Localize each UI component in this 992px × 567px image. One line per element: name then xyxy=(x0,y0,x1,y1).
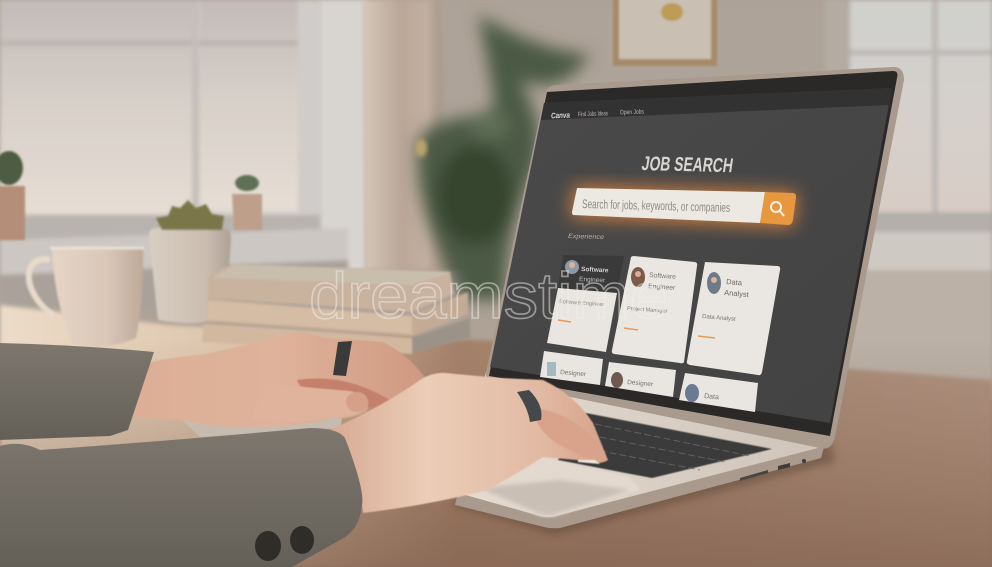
job card 5: Designer xyxy=(627,379,654,388)
job card 3: Analyst xyxy=(724,288,750,299)
job card 1: Engineer xyxy=(579,276,606,284)
upper sleeve xyxy=(0,343,154,440)
left hand and sleeve xyxy=(0,333,428,440)
ring on left hand xyxy=(333,341,352,376)
plant pot far left xyxy=(0,151,25,240)
nav text: Find Jobs Ideas xyxy=(578,110,609,118)
lower sleeve xyxy=(0,428,362,567)
ring on right hand xyxy=(517,390,542,422)
job card 6 xyxy=(679,373,758,412)
laptop base edge under left hand xyxy=(182,405,345,437)
room background wall xyxy=(0,0,992,400)
job card 4: Designer xyxy=(560,369,587,378)
laptop xyxy=(455,67,904,528)
stack of books xyxy=(202,264,470,354)
nav text: Canva xyxy=(551,111,571,120)
search bar xyxy=(572,188,796,225)
job card 2: Engineer xyxy=(648,283,676,292)
curtain xyxy=(362,0,462,270)
nav bar xyxy=(541,88,892,120)
left hand xyxy=(128,333,428,427)
picture frame xyxy=(613,0,717,66)
search bar glow xyxy=(570,186,797,227)
search bar: Search for jobs, keywords, or companies xyxy=(582,197,730,215)
keyboard xyxy=(558,413,772,478)
job card 1: Software xyxy=(581,266,609,274)
job card 1 xyxy=(547,255,624,352)
screen xyxy=(490,88,892,423)
cuff buttons xyxy=(255,526,314,561)
back wall centre xyxy=(440,0,850,160)
icon: magnifier xyxy=(771,202,784,216)
watermark: dreamstime xyxy=(309,259,668,332)
table top xyxy=(0,305,992,567)
title: JOB SEARCH: JOB SEARCH xyxy=(640,153,734,177)
leaf highlight xyxy=(415,139,427,157)
lid outer frame xyxy=(486,67,904,449)
job card 4 xyxy=(540,351,603,385)
job card 2 xyxy=(612,256,697,363)
shadow under laptop xyxy=(450,440,835,535)
left window xyxy=(0,0,322,232)
job card 6: Data xyxy=(704,393,719,401)
window sill left xyxy=(0,215,348,310)
wall between window and curtain xyxy=(320,0,366,270)
succulent in large pot xyxy=(149,200,231,323)
job card 2: Project Manager xyxy=(627,306,668,315)
job card 3 xyxy=(687,262,780,375)
touchpad xyxy=(475,457,640,517)
laptop base xyxy=(455,372,830,528)
small plant pot on sill xyxy=(232,175,262,230)
job card 3: Data xyxy=(726,277,743,287)
blurred plant xyxy=(417,15,590,300)
nav text: Open Jobs xyxy=(620,109,645,116)
right hand and sleeve xyxy=(0,373,608,567)
ports xyxy=(740,470,768,481)
section label: Experience xyxy=(568,233,605,241)
coffee mug xyxy=(29,246,144,347)
job card 3: Data Analyst xyxy=(702,314,736,323)
right wall and window xyxy=(825,0,992,385)
nav text xyxy=(551,108,645,120)
job card 1: Software Engineer xyxy=(559,299,605,308)
job card 2: Software xyxy=(649,272,676,281)
job card 5 xyxy=(605,362,676,397)
right hand xyxy=(330,373,608,513)
